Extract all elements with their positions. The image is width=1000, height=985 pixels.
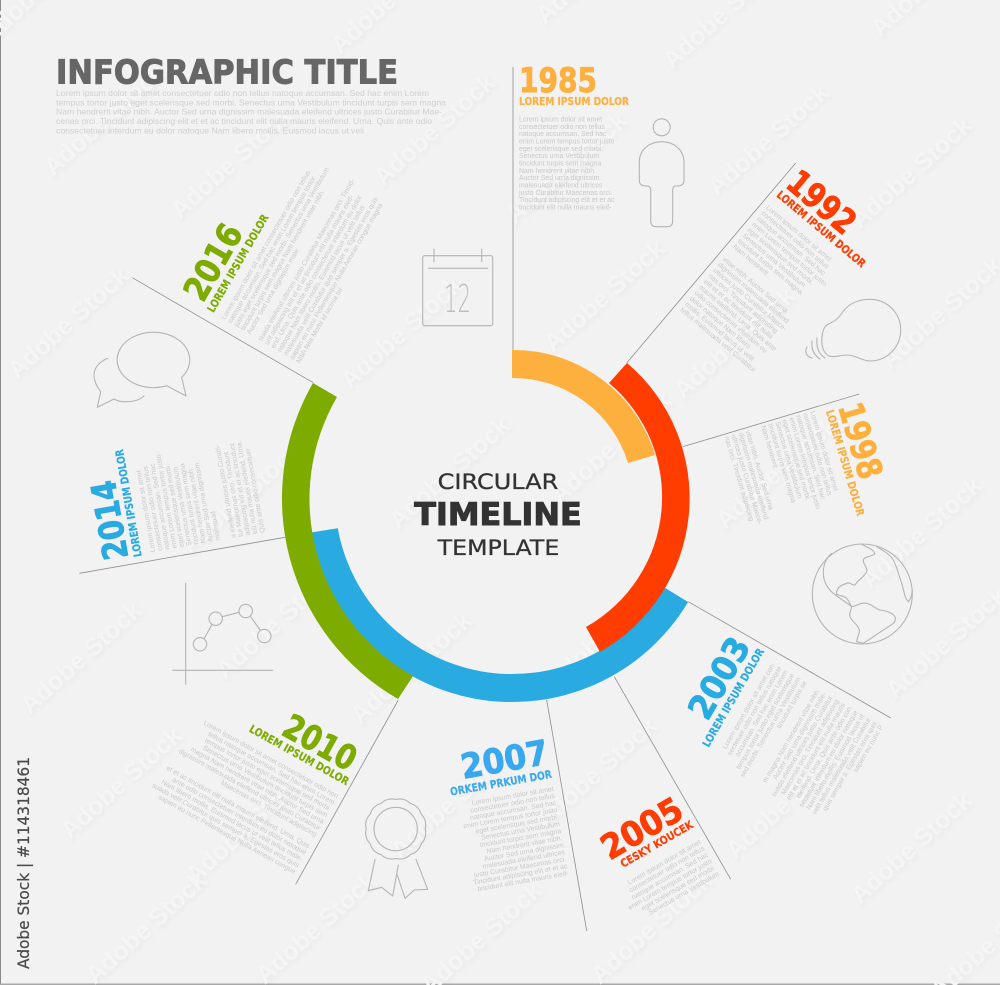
subtitle 1992: LOREM IPSUM DOLOR bbox=[774, 188, 868, 271]
body 2010 column 1: magna Nam hendrerit vitae nibh. Auctor Sed urna bbox=[189, 746, 325, 826]
year 1998: 1998 bbox=[829, 398, 890, 484]
body 2007: eget scelerisque sed morbi. bbox=[475, 814, 559, 835]
body 1992 column 1: Lorem ipsum dolor sit amet bbox=[764, 204, 833, 263]
body 2003 column 2: velit tellus malesuada velit Curabitur bbox=[811, 716, 873, 816]
body 2010 column 1: Maecenas orci. Tincidunt adipiscing bbox=[219, 780, 318, 839]
watermark pattern: Adobe Stock bbox=[15, 596, 148, 719]
body 1992 column 2: dolor natoque Nam libero bbox=[688, 295, 752, 351]
watermark pattern: Adobe Stock bbox=[385, 741, 518, 864]
body 2014 column 2: a eleifend ultrices justo Curabi- bbox=[214, 444, 238, 538]
body 2005: Lorem ipsum dolor sit amet bbox=[627, 839, 702, 887]
body 2010 column 1: tempus tortor justo eget scelerisque sed morbi. bbox=[203, 737, 332, 813]
body 1992 column 2: mollis. Euismod lacus ut velit bbox=[683, 301, 755, 363]
body 1985: enim Lorem tempus tortor justo bbox=[519, 138, 615, 145]
icon: globe bbox=[812, 544, 912, 644]
body 2010 column 2: suada velit Curabitur quis semper a. Egestas eros quis bbox=[151, 782, 301, 870]
body 1992 column 2: elit et et ac tincidunt elit nulla bbox=[702, 279, 774, 341]
watermark pattern: Adobe Stock bbox=[210, 561, 343, 684]
body 2014 column 1: tincidunt turpis sem magna bbox=[179, 463, 200, 545]
body 1985: tincidunt elit nulla mauris eleif- bbox=[519, 204, 611, 211]
body 2014 column 1: enim Lorem tempus tortor justo bbox=[155, 454, 179, 549]
center heading: TEMPLATE bbox=[437, 536, 559, 561]
subtitle 2005: CESKY KOUCEK bbox=[618, 818, 696, 871]
subtitle 1985: LOREM IPSUM DOLOR bbox=[519, 95, 629, 108]
year 2007: 2007 bbox=[458, 733, 551, 788]
body 2014 column 1: Auctor Sed urna dignissim bbox=[194, 462, 215, 542]
body 1985: Lorem ipsum dolor sit amet bbox=[519, 116, 602, 124]
panel: 2007 bbox=[443, 733, 570, 895]
watermark pattern: Adobe Stock bbox=[530, 711, 663, 834]
body 2003 column 1: tincidunt turpis se bbox=[776, 680, 809, 730]
body 2016 column 2: unt adipiscing elit et et ac tincidunt elit nulla mauris eleif- bbox=[264, 194, 356, 346]
body 1985: malesuada eleifend ultrices bbox=[519, 182, 603, 189]
panel: 1985 bbox=[518, 61, 629, 211]
body 1992 column 2: nas orci. Tincidunt adipiscing bbox=[707, 273, 779, 335]
panel: 2003 bbox=[665, 628, 888, 828]
body 2003 column 2: Nam libero mollis. Euismod lacus ut bbox=[806, 713, 866, 811]
body 2014 column 2: elit nulla mauris eleifend. Urna. bbox=[236, 440, 259, 535]
intro paragraph: consectetuer interdum eu dolor natoque Nam libero mollis. Euismod lacus ut veli bbox=[56, 125, 364, 135]
body 1998 column 2: vitae nibh. Auctor Sed urna bbox=[744, 430, 774, 511]
body 1985: natoque accumsan. Sed hac bbox=[519, 131, 607, 138]
body 1998 column 1: consectetuer odio non tellus bbox=[801, 412, 833, 497]
body 2007: tincidunt elit nulla mauris eleif- bbox=[477, 870, 569, 893]
watermark pattern: Adobe Stock bbox=[668, 281, 801, 404]
body 1992 column 1: tincidunt turpis sem magna bbox=[736, 238, 804, 296]
center heading: TIMELINE bbox=[414, 497, 582, 533]
watermark pattern: Adobe Stock bbox=[55, 721, 188, 844]
body 2005: enim Lorem tempus tortor justo bbox=[627, 858, 713, 912]
body 2010 column 2: ante odio consectetuer interdum eu dolor natoque bbox=[171, 777, 307, 857]
body 2007: Nam hendrerit vitae nibh. bbox=[486, 835, 563, 855]
year 2005: 2005 bbox=[594, 790, 690, 868]
body 2005: consectetuer odio non tellus bbox=[628, 845, 706, 894]
body 2016 column 2: suada eleifend ultrices justo Curabitur Maecenas orci. Tincid- bbox=[257, 178, 356, 343]
panel: 1998 bbox=[723, 395, 900, 548]
body 2016 column 1: Lorem ipsum dolor sit amet consectetuer odio non tellus bbox=[221, 169, 312, 321]
body 2014 column 1: eget scelerisque sed morbi. bbox=[164, 463, 186, 548]
body 2003 column 2: Maecenas orci. Tincidunt adipiscing bbox=[780, 698, 841, 796]
year 2016: 2016 bbox=[176, 217, 252, 308]
body 2007: Senectus urna Vestibulum bbox=[480, 821, 561, 842]
body 1992 column 1: Senectus urna Vestibulum bbox=[741, 232, 807, 289]
body 1992 column 2: odio consectetuer interdum eu bbox=[693, 290, 768, 355]
body 1998 column 1: natoque accumsan. Sed hac bbox=[794, 414, 826, 501]
body 2010 column 2: Nam libero mollis. Euismod lacus ut velit tellus male- bbox=[160, 779, 304, 863]
body 1992 column 2: ultrices justo Curabitur Maece- bbox=[711, 267, 788, 333]
body 2014 column 1: Nam hendrerit vitae nibh. bbox=[187, 467, 208, 544]
body 2003 column 2: suada eleifend ultrices justo Curabitur bbox=[771, 694, 835, 798]
body 1992 column 2: mauris eleifend. Urna. Quis ante bbox=[697, 284, 778, 353]
watermark pattern: Adobe Stock bbox=[720, 741, 853, 864]
body 2010 column 2: sapien eu nunc Pellentesque Nulla Aenean congue bbox=[157, 794, 297, 876]
icon: person bbox=[639, 119, 684, 227]
watermark pattern: Adobe Stock bbox=[545, 386, 678, 509]
center heading bbox=[414, 470, 582, 561]
watermark pattern: Adobe Stock bbox=[845, 786, 978, 909]
watermark pattern: Adobe Stock bbox=[500, 106, 633, 229]
intro paragraph: tempus tortor justo eget scelerisque sed morbi. Senectus urna Vestibulum tincidunt turpis sem magna bbox=[56, 97, 446, 107]
body 1985: Tincidunt adipiscing elit et et ac bbox=[519, 197, 615, 204]
body 2003 column 1: tempus tortor justo eget scelerisque bbox=[735, 673, 796, 771]
heading block bbox=[56, 52, 446, 135]
body 1992 column 1: enim Lorem tempus tortor justo bbox=[750, 221, 828, 288]
body 2010 column 2: et et ac tincidunt elit nulla mauris eleifend. Urna. Quis bbox=[165, 765, 311, 850]
icon: calendar bbox=[423, 249, 493, 326]
body 1992 column 1: eget scelerisque sed morbi. bbox=[745, 227, 815, 286]
subtitle 2003: LOREM IPSUM DOLOR bbox=[700, 646, 767, 750]
body 2007: tincidunt turpis sem magna bbox=[479, 828, 562, 849]
body 2003 column 1: sectetuer odio non tellus natoque bbox=[727, 665, 783, 757]
watermark pattern: Adobe Stock bbox=[383, 411, 516, 534]
year 2010: 2010 bbox=[276, 707, 363, 780]
subtitle 1998: LOREM IPSUM DOLOR bbox=[823, 408, 867, 518]
body 1998 column 1: eget scelerisque sed morbi. bbox=[780, 419, 811, 502]
body 1998 column 1: enim Lorem tempus tortor justo bbox=[787, 417, 821, 510]
body 1992 column 2: dignissim malesuada eleifend bbox=[716, 262, 790, 325]
icon: calendar: 12 bbox=[444, 277, 471, 321]
body 2003 column 1: Lorem ipsum dolor sit amet con- bbox=[722, 662, 777, 750]
panel: 2014 bbox=[79, 426, 267, 564]
icon: line chart bbox=[173, 583, 273, 684]
watermark pattern: Adobe Stock bbox=[180, 766, 313, 889]
body 2014 column 2: tur Maecenas orci. Tincidunt bbox=[223, 451, 245, 537]
body 1992 column 1: Nam hendrerit bbox=[731, 244, 769, 277]
body 1998 column 2: ultrices justo Curabitur Maece- bbox=[730, 434, 763, 525]
body 2014 column 1: Lorem ipsum dolor sit amet bbox=[136, 470, 157, 553]
body 2003 column 1: accumsan. Sed hac enim Lorem bbox=[734, 669, 790, 758]
panel: 2005 bbox=[588, 789, 723, 924]
body 1985: Auctor Sed urna dignissim bbox=[519, 175, 600, 182]
icon: award rosette bbox=[366, 799, 428, 898]
year 2003: 2003 bbox=[680, 630, 759, 726]
circular timeline ring bbox=[282, 350, 690, 702]
stock id label: Adobe Stock | #114318461 bbox=[14, 757, 33, 969]
icon: speech bubbles bbox=[94, 332, 190, 407]
body 2003 column 1: sed morbi. Senectus urna Vestibulum bbox=[739, 676, 803, 779]
body 1985: Nam hendrerit vitae nibh. bbox=[519, 168, 596, 175]
body 2007: justo Curabitur Maecenas orci. bbox=[472, 856, 567, 880]
body 1998 column 1: Nam hendrerit bbox=[759, 425, 778, 469]
body 2016 column 1: Auctor Sed urna dignissim male bbox=[246, 248, 301, 336]
body 2016 column 1: tincidunt turpis sem magna Nam hendrerit vitae nibh. bbox=[240, 189, 326, 332]
divider lines bbox=[79, 67, 891, 931]
watermark pattern: Adobe Stock bbox=[855, 471, 988, 594]
body 1985: Senectus urna Vestibulum bbox=[519, 153, 599, 160]
body 2014 column 1: Senectus urna Vestibulum bbox=[172, 466, 193, 546]
body 2007: Tincidunt adipiscing elit et et ac bbox=[473, 863, 569, 887]
body 2016 column 1: justo eget scelerisque sed morbi. Senectus urna Vestibulum bbox=[233, 166, 331, 329]
body 1998 column 1: Senectus urna Vestibulum bbox=[773, 421, 803, 500]
body 1985: justo Curabitur Maecenas orci. bbox=[518, 190, 613, 197]
body 2003 column 2: Auctor Sed urna dignissim male- bbox=[772, 691, 828, 781]
subtitle 2007: ORKEM PRKUM DOR bbox=[449, 768, 553, 799]
body 2014 column 1: malesuad bbox=[210, 510, 222, 541]
body 1985: consectetuer odio non tellus bbox=[519, 124, 605, 131]
watermark pattern: Adobe Stock bbox=[540, 571, 673, 694]
body 1992 column 2: tellus malesuada velit Curabitur bbox=[679, 307, 757, 374]
body 1998 column 2: nas orci. Tincidunt adipiscing bbox=[723, 436, 755, 522]
body 2007: Lorem ipsum dolor sit amet bbox=[471, 786, 554, 807]
year 2014: 2014 bbox=[84, 477, 137, 563]
panel: 2016 bbox=[174, 130, 395, 365]
body 1985: eget scelerisque sed morbi. bbox=[519, 146, 603, 153]
body 2003 column 2: eleifend. Urna. Quis ante odio con bbox=[795, 706, 854, 800]
body 2010 column 1: Senectus urna Vestibulum tincidunt turpis sem bbox=[201, 745, 329, 819]
body 2014 column 2: adipiscing elit et et ac tincidunt bbox=[229, 443, 252, 536]
body 2014 column 1: consectetuer odio non tellus bbox=[142, 465, 164, 551]
intro paragraph bbox=[56, 88, 446, 135]
year 1985: 1985 bbox=[519, 61, 597, 101]
body 2010 column 1: dignissim malesuada eleifend ultrices justo Curabitur bbox=[177, 748, 322, 833]
body 2007: malesuada eleifend ultrices bbox=[482, 849, 566, 871]
body 2003 column 2: sapien eu nunc P bbox=[853, 724, 885, 774]
watermark pattern: Adobe Stock bbox=[368, 68, 501, 191]
body 2007: natoque accumsan. Sed hac bbox=[470, 800, 557, 822]
subtitle 2014: LOREM IPSUM DOLOR bbox=[113, 448, 145, 558]
body 2016 column 1: natoque accumsan. Sed hac enim Lorem tempus tortor bbox=[227, 175, 318, 325]
watermark pattern: Adobe Stock bbox=[845, 111, 978, 234]
intro paragraph: Lorem ipsum dolor sit amet consectetuer odio non tellus natoque accumsan. Sed hac enim Lorem bbox=[56, 88, 429, 98]
arc: red bbox=[586, 363, 690, 652]
body 2016 column 2: sapien eu nunc Pellentesque Nulla Aenean congue magna bbox=[289, 202, 385, 361]
body 2014 column 1: natoque accumsan. Sed hac bbox=[149, 462, 172, 550]
arc: blue bbox=[310, 528, 688, 702]
subtitle 2016: LOREM IPSUM DOLOR bbox=[205, 212, 272, 315]
body 1992 column 2: vitae nibh. Auctor Sed urna bbox=[721, 256, 789, 315]
watermark pattern: Adobe Stock bbox=[38, 58, 171, 181]
body 2010 column 1: Lorem ipsum dolor sit amet consectetuer odio non bbox=[202, 720, 339, 800]
body 2003 column 2: elit et et ac tincidunt elit nulla mauris bbox=[786, 702, 847, 802]
body 2016 column 2: end. Urna. Quis ante odio consectetuer interdum eu dolor bbox=[270, 194, 364, 350]
watermark pattern: Adobe Stock bbox=[175, 436, 308, 559]
subtitle 2010: LOREM IPSUM DOLOR bbox=[247, 722, 352, 788]
intro paragraph: Nam hendrerit vitae nibh. Auctor Sed urna dignissim malesuada eleifend ultrices justo Curabitur Mae- bbox=[56, 107, 442, 117]
intro paragraph: cenas orci. Tincidunt adipiscing elit et et ac tincidunt elit nulla mauris eleifend. Urna. Quis ante odio bbox=[56, 116, 432, 126]
watermark pattern: Adobe Stock bbox=[702, 78, 835, 201]
body 2003 column 2: sectetuer interdum eu dolor natoque bbox=[798, 709, 860, 809]
body 2007: Auctor Sed urna dignissim bbox=[484, 842, 564, 863]
body 2005: eget scelerisque sed morbi. bbox=[640, 864, 717, 913]
watermark pattern: Adobe Stock bbox=[2, 261, 135, 384]
body 1998 column 1: Lorem ipsum dolor sit amet bbox=[808, 410, 839, 492]
watermark pattern: Adobe Stock bbox=[165, 101, 298, 224]
arc: green bbox=[282, 383, 413, 699]
body 1985: tincidunt turpis sem magna bbox=[519, 160, 602, 167]
watermark pattern: Adobe Stock bbox=[335, 271, 468, 394]
body 2016 column 2: malesuada velit Curabitur quis semper a. Egestas eros quis bbox=[283, 196, 380, 357]
body 2016 column 2: Nibh felis Morbi Id lacinia tel bbox=[295, 286, 345, 365]
panel: 1992 bbox=[679, 162, 890, 384]
watermark pattern: Adobe Stock bbox=[538, 234, 671, 357]
body 2003 column 2: quis semper a. Egestas eros quis bbox=[822, 720, 879, 812]
watermark pattern: Adobe Stock bbox=[345, 606, 478, 729]
year 1992: 1992 bbox=[778, 162, 864, 243]
body 2014 column 2: Quis ante odio consectetuer bbox=[245, 447, 267, 533]
body 2005: natoque accumsan. Sed hac bbox=[630, 851, 710, 901]
body 2007: enim Lorem tempus tortor justo bbox=[463, 807, 558, 830]
body 2016 column 2: natoque Nam libero mollis. Euismod lacus ut velit tellus bbox=[276, 204, 367, 354]
watermark pattern: Adobe Stock bbox=[710, 411, 843, 534]
icon: light bulb bbox=[806, 299, 901, 361]
body 2007: consectetuer odio non tellus bbox=[470, 793, 556, 815]
panel: 2010 bbox=[147, 665, 368, 877]
title: INFOGRAPHIC TITLE bbox=[56, 52, 398, 91]
body 1998 column 1: tincidunt turpis sem magna bbox=[766, 423, 797, 504]
body 1998 column 2: dignissim malesuada eleifend bbox=[737, 432, 769, 520]
arc: orange bbox=[512, 350, 655, 463]
body 1992 column 1: natoque accumsan. Sed hac bbox=[755, 216, 827, 277]
center heading: CIRCULAR bbox=[438, 470, 558, 495]
body 2005: Senectus urna Vestibulum bbox=[648, 871, 721, 917]
body 2010 column 1: tellus natoque accumsan. Sed hac enim Lorem bbox=[207, 731, 336, 807]
body 2003 column 2: m magna Nam hendrerit vitae nibh. bbox=[762, 687, 822, 784]
body 1992 column 1: consectetuer odio non tellus bbox=[760, 210, 830, 271]
